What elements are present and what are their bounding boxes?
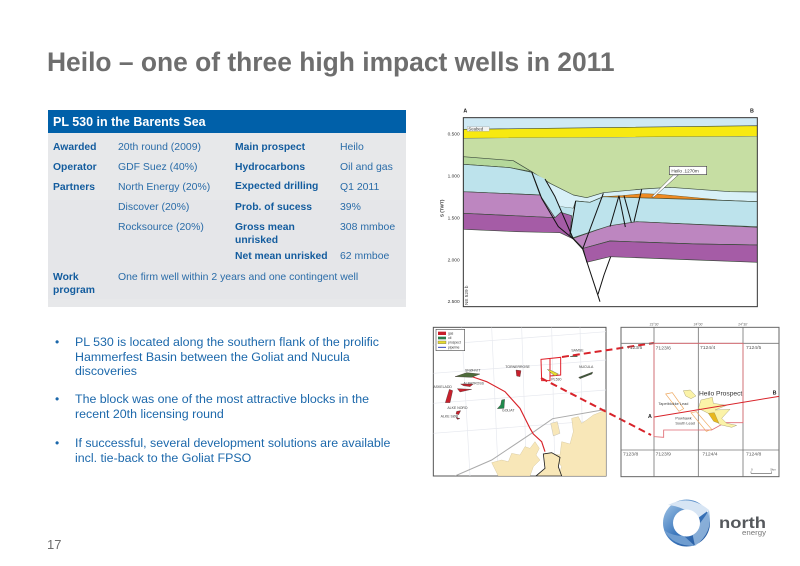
field labels (433, 349, 594, 418)
regional map frame (433, 327, 606, 476)
prospect polygons (683, 390, 737, 427)
label: operator: Operator (53, 162, 97, 173)
legend (436, 329, 465, 351)
axis: two-way time: 2.500 (448, 299, 460, 305)
page number: 17 (47, 537, 61, 552)
label: hydrocarbons: Hydrocarbons (235, 162, 305, 173)
value: gross mean unrisked: 308 mmboe (340, 222, 395, 233)
detail labels (648, 390, 777, 425)
pipeline (470, 376, 545, 452)
detail map frame (621, 327, 779, 477)
PL 530 licence outline (541, 357, 561, 381)
bullet 3 text: If successful, several development solutions are available (75, 436, 390, 450)
block labels: 7124/4 (702, 451, 718, 457)
field labels: GOLIAT (502, 408, 515, 412)
detail labels: Powhawk (675, 416, 692, 420)
bullet 1 text: PL 530 is located along the southern flank of the prolific (75, 335, 379, 349)
legend: gas (448, 332, 454, 336)
title: Heilo – one of three high impact wells in 2011 (47, 47, 615, 77)
block labels (623, 345, 761, 457)
legend: pipeline (448, 345, 460, 349)
field labels: SAMSE (571, 349, 584, 353)
label: probability of success: Prob. of sucess (235, 202, 312, 213)
label: gross mean unrisked: unrisked (235, 234, 278, 246)
map: regional Barents Sea (433, 327, 606, 476)
block labels: 7123/8 (623, 451, 638, 457)
value: net mean unrisked: 62 mmboe (340, 251, 389, 262)
field labels: PL530 (551, 378, 561, 382)
block labels: 7124/8 (746, 451, 761, 457)
bullet 2 text: recent 20th licensing round (75, 407, 224, 421)
scale bar (751, 468, 776, 473)
map: Heilo prospect detail (621, 322, 779, 477)
bullet 2 text: The block was one of the most attractive blocks in the (75, 392, 369, 406)
panel: licence table (48, 110, 406, 307)
detail labels: Heilo Prospect (699, 390, 742, 397)
cross-section labels: B (750, 109, 754, 115)
bullet 1 text (75, 335, 379, 378)
field labels: TORNERROSE (505, 365, 531, 369)
section layers (464, 118, 757, 263)
bullet 3 text (75, 436, 390, 465)
label: net mean unrisked: Net mean unrisked (235, 251, 328, 262)
bullet 3 marker: • (55, 436, 59, 450)
label: main prospect: Main prospect (235, 142, 305, 153)
logo tagline: energy (742, 528, 766, 537)
label: seabed: Seabed (468, 127, 484, 132)
axis: two-way time: 1.000 (448, 174, 460, 180)
vertical profile note: NE 529 b (464, 285, 469, 305)
value: work program: One firm well within 2 years and one contingent well (118, 272, 358, 283)
cross-section labels (463, 109, 754, 115)
label: gross mean unrisked: Gross mean (235, 222, 295, 233)
table heading (48, 110, 406, 133)
field labels: NUCULA (579, 365, 594, 369)
top coordinate ticks (650, 322, 748, 326)
licence outline (654, 343, 743, 437)
label: work program (53, 272, 95, 296)
label: work program: Work (53, 272, 79, 283)
detail labels: Tapetblokke Lead (658, 402, 688, 406)
chart: geological cross-section (439, 109, 757, 307)
bullet 2 marker: • (55, 392, 59, 406)
label: seabed (467, 127, 489, 132)
grid (433, 327, 606, 476)
axis: two-way time: 0.500 (448, 131, 460, 137)
bullet 1 text: discoveries (75, 364, 137, 378)
prospect (547, 369, 558, 376)
bullet 3 text: incl. tie-back to the Goliat FPSO (75, 451, 251, 465)
axis: two-way time: 1.500 (448, 215, 460, 221)
value: operator: GDF Suez (40%) (118, 162, 197, 173)
label: partners: Partners (53, 182, 95, 193)
top coordinate ticks: 23°30' (650, 322, 659, 326)
legend: oil (448, 336, 452, 340)
land: Nordkapp outline (536, 453, 562, 476)
lead outlines (666, 393, 712, 431)
block labels: 7123/9 (656, 451, 671, 457)
logo ring (663, 500, 710, 546)
top coordinate ticks: 24°30' (738, 322, 748, 326)
bullet 1 marker: • (55, 335, 59, 349)
land: eastern coast (545, 410, 606, 476)
detail labels: B (773, 391, 777, 397)
value: expected drilling: Q1 2011 (340, 182, 379, 193)
label: awarded: Awarded (53, 142, 96, 153)
axis: two-way time: 2.000 (448, 257, 460, 263)
cross-section labels: A (463, 109, 467, 115)
label: work program: program (53, 284, 95, 296)
label: Heilo callout (652, 166, 707, 197)
bullet list (55, 335, 390, 465)
fault lines (532, 172, 642, 302)
value: partner north energy: North Energy (20%) (118, 182, 210, 193)
logo wordmark: north (719, 515, 766, 532)
fields (445, 355, 593, 419)
legend: prospect (448, 341, 461, 345)
label: gross mean unrisked (235, 222, 295, 246)
label: Heilo callout: Heilo .1270m (671, 168, 699, 173)
grid blocks (621, 327, 779, 477)
detail labels: South Lead (675, 421, 695, 425)
regional map content (433, 327, 606, 476)
block labels: 7123/5 (627, 345, 642, 351)
value: hydrocarbons: Oil and gas (340, 162, 393, 173)
top coordinate ticks: 24°00' (694, 322, 703, 326)
axis: two-way time: S (TWT) (439, 199, 444, 217)
value: probability of success: 39% (340, 202, 361, 213)
logo: north energy (663, 500, 766, 546)
scale bar: 0 (751, 468, 753, 472)
field labels: ASKELADD (433, 385, 452, 389)
land: western peninsula (492, 442, 540, 476)
scale bar: 5km (770, 468, 776, 472)
label: expected drilling: Expected drilling (235, 181, 318, 192)
block labels: 7124/4 (700, 345, 715, 351)
section line A-B (654, 396, 779, 417)
axis: two-way time (439, 131, 460, 305)
dashed zoom connectors (541, 343, 654, 435)
block labels: 7124/5 (746, 345, 761, 351)
section frame (463, 118, 757, 307)
detail labels: A (648, 414, 652, 420)
block labels: 7123/6 (656, 346, 671, 352)
bullet 2 text (75, 392, 369, 421)
value: partner discover: Discover (20%) (118, 202, 189, 213)
coastline border (455, 409, 606, 476)
field labels: SNØHVIT (465, 368, 481, 372)
value: partner rocksource: Rocksource (20%) (118, 222, 204, 233)
table heading: PL 530 in the Barents Sea (53, 115, 206, 129)
value: awarded: 20th round (2009) (118, 142, 201, 153)
bullet 1 text: Hammerfest Basin between the Goliat and Nucula (75, 350, 350, 364)
value: main prospect: Heilo (340, 142, 364, 153)
land: small island (551, 422, 560, 436)
field labels: ALKE SØR (441, 414, 459, 418)
field labels: ALBATROSS (463, 382, 485, 386)
table row stripe (48, 200, 406, 299)
field labels: ALKE NORD (447, 406, 468, 410)
